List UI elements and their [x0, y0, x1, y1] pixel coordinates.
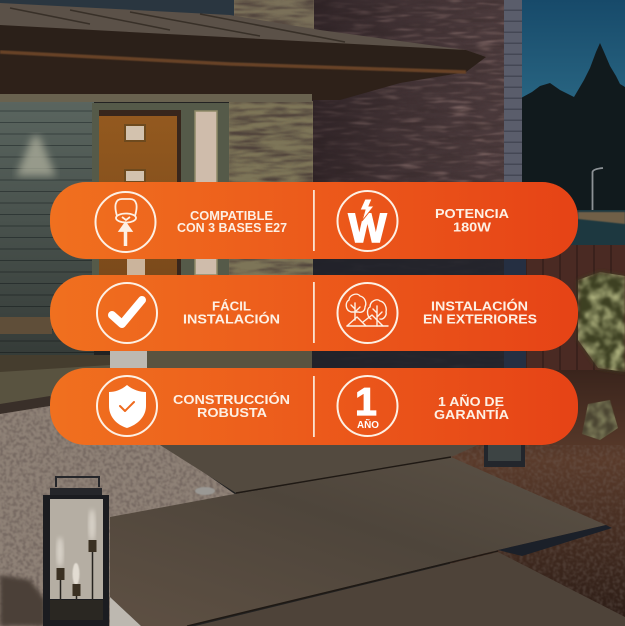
divider — [313, 282, 315, 343]
icon: one year: 1 — [355, 381, 377, 424]
icon: bulb socket with arrow — [96, 192, 156, 252]
road — [521, 210, 625, 246]
right bush — [575, 270, 625, 372]
patio ground — [0, 351, 312, 445]
white gravel strip — [110, 597, 141, 626]
text: construcción robusta: ROBUSTA — [197, 405, 268, 420]
divider — [313, 190, 315, 251]
left siding — [0, 100, 94, 362]
gravel — [0, 400, 240, 626]
dark stone wall — [312, 0, 508, 372]
text: potencia 180W: 180W — [453, 220, 492, 234]
text: 1 año de garantía — [434, 394, 510, 422]
door frame — [92, 103, 229, 275]
upper wall — [0, 0, 236, 16]
siding strip — [504, 0, 522, 258]
bench — [0, 317, 52, 334]
small plant — [582, 400, 618, 440]
text: compatible con 3 bases E27: CON 3 BASES E27 — [177, 220, 287, 235]
text: construcción robusta — [173, 392, 290, 420]
icon: check mark — [97, 283, 157, 343]
text: fácil instalación: FÁCIL — [212, 298, 251, 314]
path slab top — [160, 445, 478, 493]
light stone wall — [229, 101, 313, 275]
dark ground right — [450, 370, 625, 626]
door — [99, 110, 181, 275]
gravel shadow — [0, 575, 45, 626]
path slab middle — [110, 457, 606, 626]
text: 1 año de garantía: 1 AÑO DE — [438, 394, 504, 409]
trees — [521, 43, 625, 215]
foreground lantern — [43, 477, 109, 626]
roof seams — [10, 8, 345, 42]
white post — [110, 351, 147, 369]
soffit — [0, 53, 466, 100]
icon: one year: AÑO — [357, 418, 379, 431]
text: instalación en exteriores: INSTALACIÓN — [431, 298, 528, 314]
divider — [313, 376, 315, 437]
path slab lower — [195, 552, 625, 626]
roof fascia — [0, 25, 486, 72]
street lamp — [592, 168, 603, 214]
icon: one year — [338, 376, 398, 436]
text: fácil instalación: INSTALACIÓN — [183, 312, 280, 326]
dark slab edge — [498, 525, 612, 556]
panel: feature row 2 — [50, 275, 578, 351]
sky — [515, 0, 625, 130]
text: instalación en exteriores — [423, 298, 537, 326]
wall light glow — [16, 136, 56, 176]
text: potencia 180W: POTENCIA — [435, 206, 510, 221]
porch steps — [0, 355, 110, 375]
text: compatible con 3 bases E27: COMPATIBLE — [190, 208, 273, 223]
dirt texture — [450, 445, 625, 626]
slab joint — [187, 457, 498, 626]
text: fácil instalación — [183, 298, 280, 326]
patio edge — [0, 396, 60, 416]
panel: feature row 3 — [50, 368, 578, 445]
metal roof — [0, 3, 486, 57]
text: potencia 180W — [435, 206, 510, 234]
upper stone — [234, 0, 314, 32]
icon: trees outdoors — [338, 283, 398, 343]
text: instalación en exteriores: EN EXTERIORES — [423, 312, 537, 326]
text: compatible con 3 bases E27 — [177, 208, 287, 235]
ground light — [195, 487, 215, 495]
copper gutter line — [0, 52, 466, 72]
distant lantern — [484, 440, 525, 467]
fence — [515, 245, 625, 372]
text: construcción robusta: CONSTRUCCIÓN — [173, 392, 290, 407]
icon: wattage W with bolt: W — [348, 205, 387, 251]
text: 1 año de garantía: GARANTÍA — [434, 407, 510, 422]
side window — [195, 111, 217, 275]
icon: wattage W with bolt — [338, 191, 398, 251]
icon: shield with check — [97, 376, 157, 436]
panel: feature row 1 — [50, 182, 578, 259]
